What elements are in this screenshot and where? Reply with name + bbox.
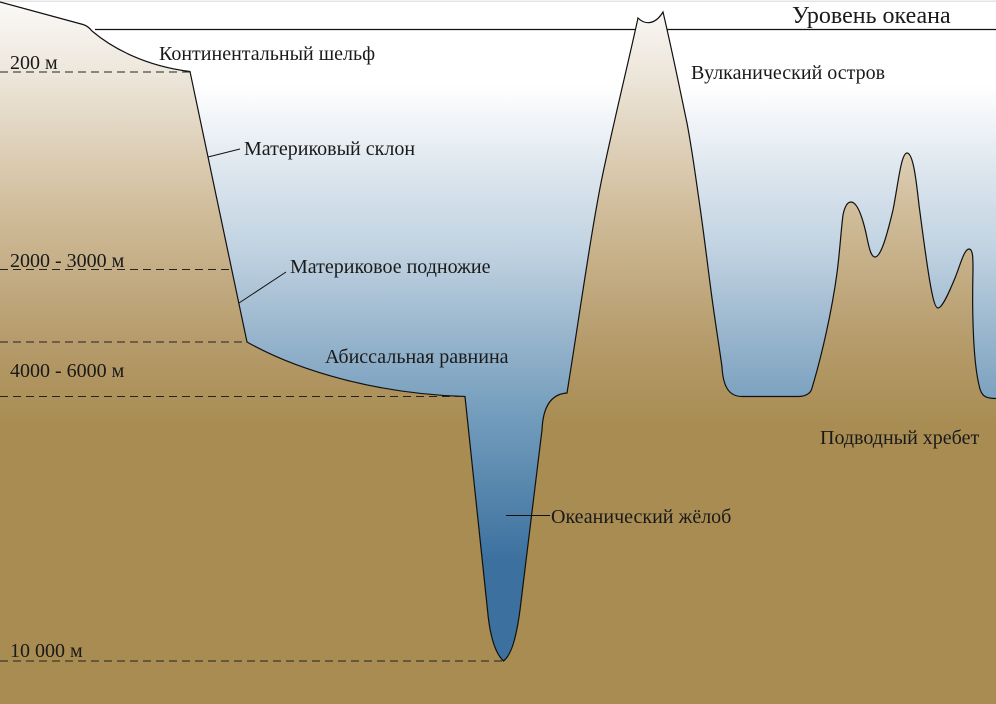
label: volcanic island: Вулканический остров bbox=[691, 62, 885, 84]
label: oceanic trench: Океанический жёлоб bbox=[551, 506, 731, 528]
label: continental shelf: Континентальный шельф bbox=[159, 43, 375, 65]
leader line: continental slope bbox=[208, 149, 240, 157]
leader line: trench bbox=[506, 514, 550, 516]
depth label: 200 m: 200 м bbox=[10, 52, 58, 74]
label: sea level: Уровень океана bbox=[792, 3, 951, 29]
top edge line bbox=[0, 0, 996, 2]
label: continental slope: Материковый склон bbox=[244, 138, 415, 160]
leader line: continental rise bbox=[239, 272, 286, 303]
depth lines bbox=[0, 72, 503, 661]
depth label: 2000-3000 m: 2000 - 3000 м bbox=[10, 250, 125, 272]
label: continental rise: Материковое подножие bbox=[290, 256, 491, 278]
depth label: 4000-6000 m: 4000 - 6000 м bbox=[10, 360, 125, 382]
label: abyssal plain: Абиссальная равнина bbox=[325, 346, 509, 368]
depth label: 10 000 m: 10 000 м bbox=[10, 640, 83, 662]
sea level line bbox=[95, 28, 996, 30]
label: submarine ridge: Подводный хребет bbox=[820, 427, 979, 449]
